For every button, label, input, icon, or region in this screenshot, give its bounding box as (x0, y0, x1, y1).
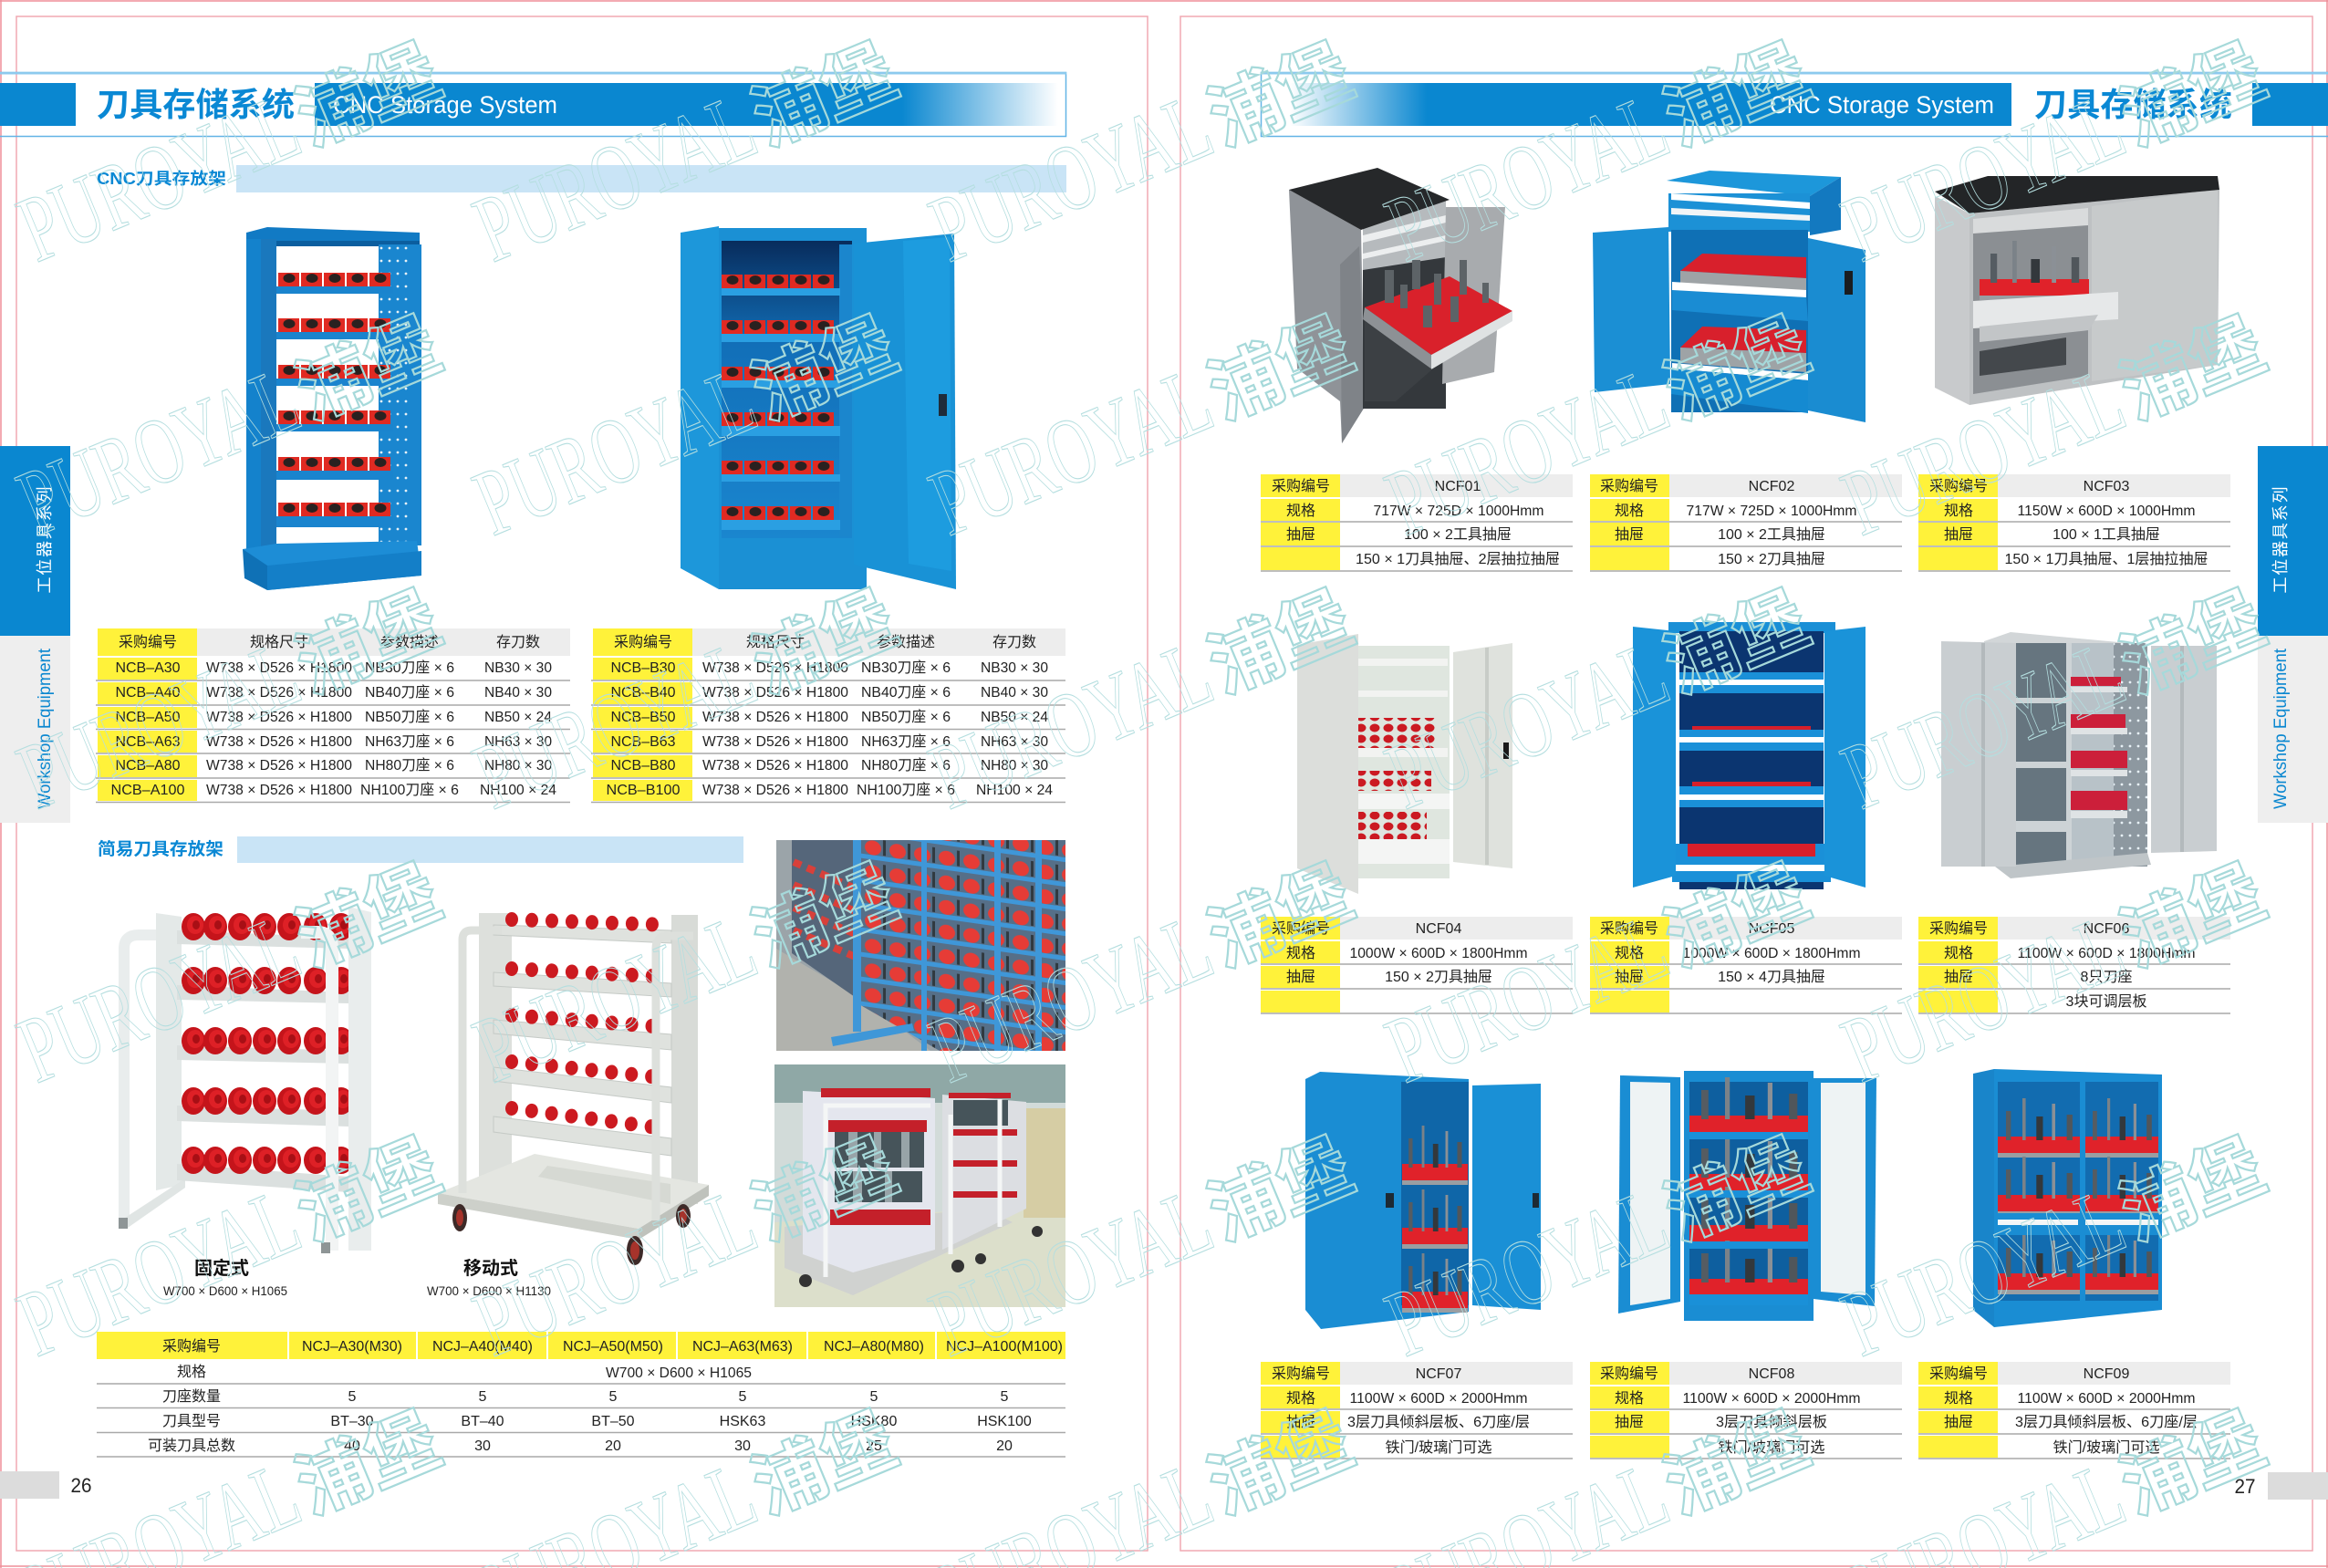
spec table: NCF03: 1150W × 600D × 1000Hmm (2018, 504, 2195, 519)
table: NCB-A rack specs: W738 × D526 × H1800 (206, 758, 352, 774)
table: NCB-A rack specs: NB30 × 30 (484, 660, 552, 676)
watermark: repeated PUROYAL brand mark: 浦堡 (1654, 1398, 1819, 1530)
spec table: NCF01: 150 × 1刀具抽屉、2层抽拉抽屉 (1356, 551, 1560, 567)
watermark: repeated PUROYAL brand mark: 浦堡 (1198, 304, 1363, 435)
watermark: repeated PUROYAL brand mark: PUROYAL (917, 73, 1226, 283)
spec table: NCF01: 100 × 2工具抽屉 (1404, 526, 1512, 543)
watermark: repeated PUROYAL brand mark: 浦堡 (286, 851, 451, 982)
spec table: NCF06: 3块可调层板 (2066, 993, 2146, 1010)
table: NCB-B rack specs: W738 × D526 × H1800 (702, 783, 848, 798)
spec table: NCF02: 717W × 725D × 1000Hmm (1686, 504, 1857, 519)
sidebar: right page section tab: 工位器具系列 (2271, 485, 2290, 593)
watermark: repeated PUROYAL brand mark: 浦堡 (2110, 851, 2275, 982)
watermark: repeated PUROYAL brand mark: 浦堡 (1198, 30, 1363, 161)
product image: NCF01 cabinet (1289, 168, 1512, 443)
spec table: NCF02: 规格 (1615, 503, 1644, 519)
spec table: NCF05 (1590, 917, 1902, 1013)
watermark: repeated PUROYAL brand mark: 浦堡 (286, 577, 451, 709)
table: NCB-A rack specs: NCB–A40 (115, 685, 181, 701)
product image: NCF07 cabinet (1305, 1072, 1541, 1329)
sidebar: left page section tab (0, 446, 70, 823)
watermark: repeated PUROYAL brand mark: PUROYAL (1373, 894, 1682, 1104)
table: NCB-B rack specs: 采购编号 (614, 634, 672, 650)
spec table: NCF02: 100 × 2工具抽屉 (1718, 526, 1825, 543)
table: NCB-B rack specs: NCB–B30 (611, 660, 676, 676)
watermark: repeated PUROYAL brand mark: PUROYAL (1829, 1168, 2138, 1377)
section heading: CNC tool racks (97, 165, 1066, 192)
spec table: NCF07: 3层刀具倾斜层板、6刀座/层 (1347, 1414, 1530, 1430)
table: simple rack specs: 5 (1001, 1389, 1009, 1405)
table: NCB-A rack specs: NB50刀座 × 6 (365, 709, 454, 725)
sidebar: right page section tab: Workshop Equipment (2271, 648, 2291, 809)
product image: open frame rack (243, 227, 421, 590)
table: NCB-B rack specs: NB30刀座 × 6 (861, 659, 951, 676)
table: simple rack specs: 可装刀具总数 (148, 1438, 235, 1454)
product image: NCF06 cabinet (1941, 632, 2217, 878)
table: simple rack specs: NCJ–A40(M40) (432, 1339, 533, 1355)
spec table: NCF08: 3层刀具倾斜层板 (1716, 1414, 1827, 1430)
watermark: repeated PUROYAL brand mark: PUROYAL (1373, 73, 1682, 283)
product image: NCF08 cabinet (1618, 1071, 1876, 1321)
page number: 26 (0, 1471, 91, 1499)
spec table: NCF04: 规格 (1286, 945, 1315, 961)
watermark: repeated PUROYAL brand mark: 浦堡 (2110, 577, 2275, 709)
table: NCB-A rack specs: NCB–A80 (115, 758, 181, 774)
table: NCB-A rack specs: NH80刀座 × 6 (365, 757, 454, 774)
table: simple rack specs: NCJ–A30(M30) (302, 1339, 402, 1355)
watermark: repeated PUROYAL brand mark: 浦堡 (742, 577, 907, 709)
table: simple rack specs: 5 (739, 1389, 747, 1405)
spec table: NCF01: 采购编号 (1272, 478, 1330, 494)
table: NCB-A rack specs: NH63 × 30 (484, 734, 552, 750)
watermark: repeated PUROYAL brand mark: 浦堡 (1198, 577, 1363, 709)
table: NCB-A rack specs: NB30刀座 × 6 (365, 659, 454, 676)
spec table: NCF07: 1100W × 600D × 2000Hmm (1350, 1391, 1527, 1407)
table: simple rack specs: HSK100 (977, 1414, 1032, 1429)
table: simple rack specs: NCJ–A80(M80) (824, 1339, 924, 1355)
table: NCB-B rack specs: NB30 × 30 (981, 660, 1048, 676)
product image: NCF02 cabinet (1593, 171, 1866, 422)
watermark: repeated PUROYAL brand mark: PUROYAL (461, 347, 770, 556)
caption: mobile rack: 移动式 (463, 1258, 518, 1279)
watermark: repeated PUROYAL brand mark: 浦堡 (742, 30, 907, 161)
spec table: NCF03: 规格 (1944, 503, 1973, 519)
table: NCB-B rack specs: NH80 × 30 (981, 758, 1048, 774)
panel: left page header (0, 72, 1066, 137)
table: simple rack specs: 25 (866, 1438, 882, 1454)
watermark: repeated PUROYAL brand mark: PUROYAL (461, 73, 770, 283)
table: NCB-B rack specs: NB40刀座 × 6 (861, 684, 951, 701)
table: NCB-A rack specs: NB50 × 24 (484, 710, 552, 725)
table: NCB-B rack specs: W738 × D526 × H1800 (702, 710, 848, 725)
spec table: NCF06: NCF06 (2084, 921, 2129, 937)
page number: 27 (2235, 1472, 2328, 1500)
watermark: repeated PUROYAL brand mark: PUROYAL (1829, 894, 2138, 1104)
caption: fixed rack: 固定式 (194, 1257, 249, 1279)
watermark: repeated PUROYAL brand mark: 浦堡 (286, 304, 451, 435)
section heading: CNC tool racks: CNC刀具存放架 (97, 170, 226, 188)
watermark: repeated PUROYAL brand mark: PUROYAL (461, 620, 770, 830)
photo: blue workshop racks (776, 840, 1065, 1051)
watermark: repeated PUROYAL brand mark: 浦堡 (286, 30, 451, 161)
spec table: NCF05: 规格 (1615, 945, 1644, 961)
heading: right title: 刀具存储系统 (2034, 86, 2232, 123)
table: simple rack specs: 30 (734, 1438, 751, 1454)
table: NCB-B rack specs: W738 × D526 × H1800 (702, 758, 848, 774)
table: NCB-B rack specs: 规格尺寸 (746, 634, 805, 650)
spec table: NCF09 (1918, 1362, 2230, 1459)
product image: NCF03 cabinet (1935, 176, 2219, 405)
watermark: repeated PUROYAL brand mark: PUROYAL (461, 1168, 770, 1377)
spec table: NCF06: 采购编号 (1929, 920, 1988, 937)
sidebar: right page section tab (2258, 446, 2328, 823)
watermark: repeated PUROYAL brand mark: 浦堡 (2110, 30, 2275, 161)
watermark: repeated PUROYAL brand mark: PUROYAL (5, 620, 314, 830)
watermark: repeated PUROYAL brand mark: PUROYAL (461, 894, 770, 1104)
table: NCB-A rack specs: 规格尺寸 (250, 634, 308, 650)
watermark: repeated PUROYAL brand mark: PUROYAL (917, 894, 1226, 1104)
table: NCB-A rack specs: NH100刀座 × 6 (360, 782, 459, 798)
page number: 26: 26 (71, 1474, 91, 1497)
spec table: NCF02: 采购编号 (1600, 478, 1658, 494)
table: simple rack specs: HSK63 (720, 1414, 765, 1429)
watermark: repeated PUROYAL brand mark: 浦堡 (742, 304, 907, 435)
spec table: NCF08: NCF08 (1749, 1366, 1794, 1382)
spec table: NCF06 (1918, 917, 2230, 1013)
table: simple rack specs: BT–40 (461, 1414, 504, 1429)
spec table: NCF03: 抽屉 (1944, 526, 1973, 543)
spec table: NCF01: 717W × 725D × 1000Hmm (1374, 504, 1543, 519)
watermark: repeated PUROYAL brand mark: 浦堡 (1198, 851, 1363, 982)
spec table: NCF09: 规格 (1944, 1390, 1973, 1407)
spec table: NCF08: 铁门/玻璃门可选 (1719, 1439, 1824, 1456)
table: NCB-B rack specs: NH100刀座 × 6 (857, 782, 955, 798)
table: simple rack specs: BT–30 (330, 1414, 374, 1429)
watermark: repeated PUROYAL brand mark: 浦堡 (1654, 304, 1819, 435)
table: NCB-B rack specs: 参数描述 (877, 634, 935, 650)
spec table: NCF06: 1100W × 600D × 1800Hmm (2018, 946, 2195, 961)
watermark: repeated PUROYAL brand mark: 浦堡 (1654, 577, 1819, 709)
table: simple rack specs: W700 × D600 × H1065 (606, 1366, 752, 1381)
table: NCB-B rack specs: W738 × D526 × H1800 (702, 734, 848, 750)
table: NCB-A rack specs: NCB–A50 (115, 710, 181, 725)
watermark: repeated PUROYAL brand mark: PUROYAL (5, 894, 314, 1104)
table: NCB-A rack specs: W738 × D526 × H1800 (206, 734, 352, 750)
table: NCB-A rack specs: NB40刀座 × 6 (365, 684, 454, 701)
watermark: repeated PUROYAL brand mark: PUROYAL (1373, 1168, 1682, 1377)
table: NCB-A rack specs: NH63刀座 × 6 (365, 733, 454, 750)
watermark: repeated PUROYAL brand mark: 浦堡 (286, 1398, 451, 1530)
table: simple rack specs (97, 1332, 1065, 1457)
heading: left english title: CNC Storage System (333, 91, 557, 119)
table: simple rack specs: NCJ–A63(M63) (692, 1339, 793, 1355)
table: NCB-A rack specs: W738 × D526 × H1800 (206, 783, 352, 798)
table: NCB-B rack specs: NB40 × 30 (981, 685, 1048, 701)
table: NCB-B rack specs: 存刀数 (993, 634, 1036, 650)
watermark: repeated PUROYAL brand mark: 浦堡 (2110, 1125, 2275, 1256)
table: NCB-A rack specs (96, 628, 570, 803)
spec table: NCF01: NCF01 (1435, 479, 1481, 494)
table: NCB-B rack specs: W738 × D526 × H1800 (702, 685, 848, 701)
spec table: NCF02: 抽屉 (1615, 526, 1644, 543)
spec table: NCF05: 抽屉 (1615, 969, 1644, 985)
spec table: NCF06: 8只刀座 (2081, 969, 2132, 985)
watermark: repeated PUROYAL brand mark: PUROYAL (1829, 620, 2138, 830)
table: NCB-A rack specs: W738 × D526 × H1800 (206, 710, 352, 725)
product image: mobile rack (438, 912, 709, 1265)
spec table: NCF04: 采购编号 (1272, 920, 1330, 937)
spec table: NCF07: 采购编号 (1272, 1366, 1330, 1382)
spec table: NCF08: 采购编号 (1600, 1366, 1658, 1382)
spec table: NCF05: 采购编号 (1600, 920, 1658, 937)
product image: cabinet rack with door (681, 226, 956, 589)
watermark: repeated PUROYAL brand mark: PUROYAL (1829, 73, 2138, 283)
page number: 27: 27 (2235, 1475, 2255, 1498)
watermark: repeated PUROYAL brand mark: 浦堡 (1198, 1398, 1363, 1530)
spec table: NCF04: 1000W × 600D × 1800Hmm (1350, 946, 1527, 961)
spec table: NCF09: 3层刀具倾斜层板、6刀座/层 (2015, 1414, 2198, 1430)
table: NCB-A rack specs: 存刀数 (496, 634, 540, 650)
table: simple rack specs: 刀座数量 (162, 1388, 221, 1405)
spec table: NCF09: 抽屉 (1944, 1414, 1973, 1430)
table: NCB-B rack specs: NH63 × 30 (981, 734, 1048, 750)
heading: right english title: CNC Storage System (1770, 91, 1994, 119)
spec table: NCF08: 1100W × 600D × 2000Hmm (1682, 1391, 1861, 1407)
table: NCB-A rack specs: NB40 × 30 (484, 685, 552, 701)
spec table: NCF06: 规格 (1944, 945, 1973, 961)
watermark: repeated PUROYAL brand mark: 浦堡 (1654, 1125, 1819, 1256)
table: simple rack specs: NCJ–A100(M100) (946, 1339, 1063, 1355)
table: simple rack specs: 采购编号 (162, 1338, 221, 1355)
spec table: NCF07: NCF07 (1416, 1366, 1461, 1382)
table: simple rack specs: 5 (870, 1389, 878, 1405)
watermark: repeated PUROYAL brand mark: 浦堡 (742, 1398, 907, 1530)
spec table: NCF05: 1000W × 600D × 1800Hmm (1682, 946, 1861, 961)
spec table: NCF09: 1100W × 600D × 2000Hmm (2018, 1391, 2195, 1407)
table: NCB-B rack specs: NH100 × 24 (976, 783, 1053, 798)
caption: mobile rack (427, 1258, 551, 1298)
table: simple rack specs: 20 (996, 1438, 1013, 1454)
table: NCB-A rack specs: NH80 × 30 (484, 758, 552, 774)
table: simple rack specs: NCJ–A50(M50) (563, 1339, 663, 1355)
watermark: repeated PUROYAL brand mark: PUROYAL (917, 347, 1226, 556)
table: simple rack specs: HSK80 (851, 1414, 897, 1429)
table: NCB-B rack specs: NCB–B40 (611, 685, 676, 701)
watermark: repeated PUROYAL brand mark: PUROYAL (917, 1168, 1226, 1377)
table: simple rack specs: 5 (348, 1389, 357, 1405)
table: NCB-B rack specs: NCB–B100 (606, 783, 681, 798)
caption: fixed rack (163, 1257, 287, 1298)
product image: NCF04 cabinet (1297, 634, 1512, 894)
panel: right page header (1261, 72, 2328, 137)
spec table: NCF01: 抽屉 (1286, 526, 1315, 543)
watermark: repeated PUROYAL brand mark: PUROYAL (5, 73, 314, 283)
spec table: NCF02: 150 × 2刀具抽屉 (1718, 551, 1825, 567)
spec table: NCF09: 采购编号 (1929, 1366, 1988, 1382)
watermark: repeated PUROYAL brand mark: 浦堡 (2110, 1398, 2275, 1530)
spec table: NCF05: NCF05 (1749, 921, 1794, 937)
table: simple rack specs: 40 (344, 1438, 360, 1454)
spec table: NCF03 (1918, 474, 2230, 571)
watermark: repeated PUROYAL brand mark: 浦堡 (1198, 1125, 1363, 1256)
table: NCB-B rack specs (591, 628, 1065, 803)
spec table: NCF01 (1261, 474, 1573, 571)
section heading: simple tool racks (98, 836, 743, 863)
spec table: NCF09: 铁门/玻璃门可选 (2053, 1439, 2160, 1456)
spec table: NCF07 (1261, 1362, 1573, 1459)
table: NCB-A rack specs: NCB–A63 (115, 734, 181, 750)
spec table: NCF08 (1590, 1362, 1902, 1459)
spec table: NCF01: 规格 (1286, 503, 1315, 519)
table: simple rack specs: 20 (605, 1438, 621, 1454)
photo: white racks in workshop (774, 1064, 1065, 1307)
spec table: NCF08: 规格 (1615, 1390, 1644, 1407)
spec table: NCF09: NCF09 (2084, 1366, 2129, 1382)
spec table: NCF08: 抽屉 (1615, 1414, 1644, 1430)
heading: left title: 刀具存储系统 (97, 86, 295, 123)
table: NCB-A rack specs: NCB–A100 (111, 783, 185, 798)
watermark: repeated PUROYAL brand mark: 浦堡 (286, 1125, 451, 1256)
table: simple rack specs: 30 (474, 1438, 491, 1454)
spec table: NCF05: 150 × 4刀具抽屉 (1718, 969, 1825, 985)
spec table: NCF06: 抽屉 (1944, 969, 1973, 985)
spec table: NCF04 (1261, 917, 1573, 1013)
spec table: NCF04: 150 × 2刀具抽屉 (1385, 969, 1492, 985)
caption: mobile rack: W700 × D600 × H1130 (427, 1283, 551, 1298)
table: simple rack specs: 5 (609, 1389, 618, 1405)
table: simple rack specs: BT–50 (591, 1414, 635, 1429)
table: NCB-B rack specs: NH80刀座 × 6 (861, 757, 951, 774)
watermark: repeated PUROYAL brand mark: 浦堡 (742, 851, 907, 982)
table: NCB-A rack specs: 参数描述 (380, 634, 439, 650)
table: NCB-A rack specs: NH100 × 24 (480, 783, 556, 798)
table: NCB-A rack specs: NCB–A30 (115, 660, 181, 676)
watermark: repeated PUROYAL brand mark: PUROYAL (917, 620, 1226, 830)
table: NCB-B rack specs: NH63刀座 × 6 (861, 733, 951, 750)
table: simple rack specs: 刀具型号 (162, 1413, 221, 1429)
spec table: NCF02: NCF02 (1749, 479, 1794, 494)
spec table: NCF02 (1590, 474, 1902, 571)
table: NCB-A rack specs: W738 × D526 × H1800 (206, 685, 352, 701)
sidebar: left page section tab: Workshop Equipment (36, 648, 55, 809)
watermark: repeated PUROYAL brand mark: PUROYAL (5, 1168, 314, 1377)
watermark: repeated PUROYAL brand mark: 浦堡 (1654, 851, 1819, 982)
table: NCB-B rack specs: NCB–B50 (611, 710, 676, 725)
watermark: repeated PUROYAL brand mark: PUROYAL (5, 347, 314, 556)
caption: fixed rack: W700 × D600 × H1065 (163, 1283, 287, 1298)
section heading: simple tool racks: 简易刀具存放架 (98, 839, 223, 859)
watermark: repeated PUROYAL brand mark: PUROYAL (1829, 347, 2138, 556)
table: NCB-B rack specs: NCB–B63 (611, 734, 676, 750)
spec table: NCF07: 规格 (1286, 1390, 1315, 1407)
spec table: NCF03: 150 × 1刀具抽屉、1层抽拉抽屉 (2005, 551, 2208, 567)
product image: fixed rack (119, 907, 371, 1253)
spec table: NCF03: 100 × 1工具抽屉 (2053, 526, 2160, 543)
table: NCB-B rack specs: NCB–B80 (611, 758, 676, 774)
table: NCB-A rack specs: 采购编号 (119, 634, 177, 650)
watermark: repeated PUROYAL brand mark: PUROYAL (1373, 347, 1682, 556)
product image: NCF05 cabinet (1633, 622, 1866, 889)
table: NCB-A rack specs: W738 × D526 × H1800 (206, 660, 352, 676)
table: NCB-B rack specs: NB50刀座 × 6 (861, 709, 951, 725)
watermark: repeated PUROYAL brand mark: 浦堡 (2110, 304, 2275, 435)
sidebar: left page section tab: 工位器具系列 (36, 485, 54, 593)
watermark: repeated PUROYAL brand mark: 浦堡 (1654, 30, 1819, 161)
table: simple rack specs: 规格 (177, 1364, 206, 1380)
watermark: repeated PUROYAL brand mark: PUROYAL (1373, 620, 1682, 830)
table: simple rack specs: 5 (479, 1389, 487, 1405)
spec table: NCF04: NCF04 (1416, 921, 1461, 937)
spec table: NCF03: NCF03 (2084, 479, 2129, 494)
spec table: NCF07: 铁门/玻璃门可选 (1385, 1439, 1492, 1456)
spec table: NCF04: 抽屉 (1286, 969, 1315, 985)
table: NCB-B rack specs: NB50 × 24 (981, 710, 1048, 725)
spec table: NCF03: 采购编号 (1929, 478, 1988, 494)
spec table: NCF07: 抽屉 (1286, 1414, 1315, 1430)
watermark: repeated PUROYAL brand mark: 浦堡 (742, 1125, 907, 1256)
table: NCB-B rack specs: W738 × D526 × H1800 (702, 660, 848, 676)
product image: NCF09 cabinet (1973, 1069, 2162, 1327)
